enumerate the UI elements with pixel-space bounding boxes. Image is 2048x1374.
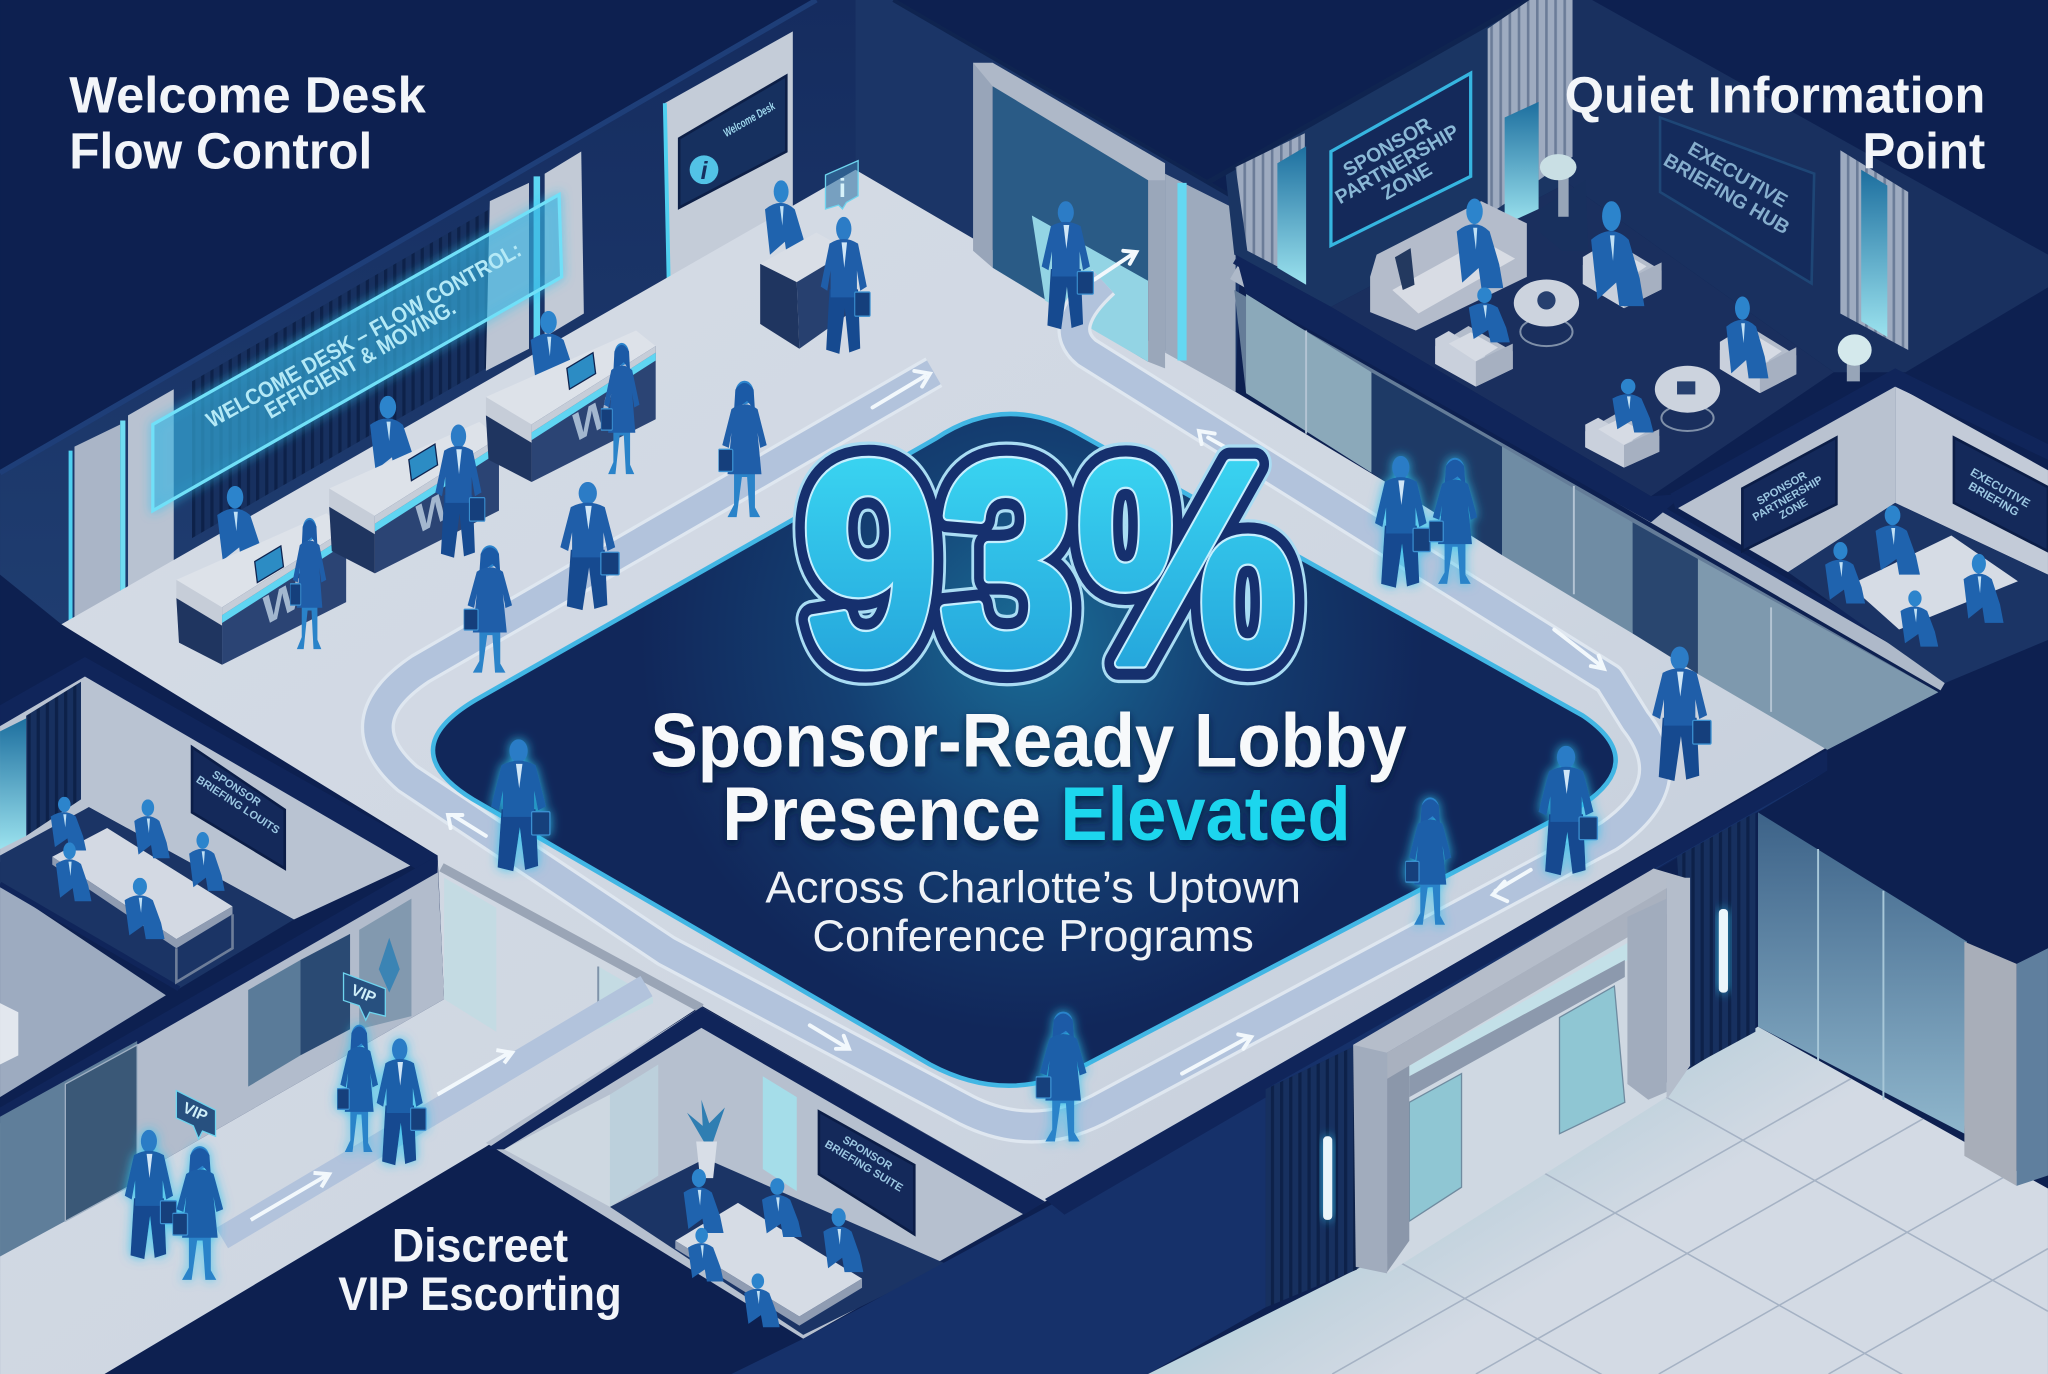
screen: executive briefing hub bbox=[1660, 118, 1814, 283]
lounge guests bbox=[1457, 199, 1768, 433]
desk 3: W bbox=[572, 384, 612, 453]
screen: executive briefing small: EXECUTIVE bbox=[1968, 466, 2032, 510]
seated attendees bbox=[684, 1169, 863, 1327]
screen: executive briefing small bbox=[1954, 438, 2048, 551]
plant bbox=[379, 938, 400, 993]
desk 3 agent bbox=[531, 311, 577, 390]
wall: door wall with entry bbox=[856, 0, 1242, 392]
corridor glass wall bbox=[1234, 261, 1945, 750]
meeting table bbox=[675, 1203, 862, 1317]
desk 2 bbox=[329, 422, 499, 573]
VIP walkway bbox=[222, 986, 647, 1238]
exit doorway bbox=[973, 63, 1236, 392]
figure: VIP pair lower bbox=[125, 1130, 223, 1280]
room: left briefing lounge bbox=[0, 657, 438, 1097]
floor tile lines bbox=[1332, 1078, 2048, 1374]
screen title: Welcome Desk bbox=[721, 99, 778, 140]
figure: right walker bbox=[1652, 647, 1711, 781]
figure: lobby woman 2 bbox=[464, 545, 512, 673]
meeting table bbox=[1849, 535, 2018, 630]
marble floor bbox=[1148, 1027, 2048, 1374]
curtains and sconces bbox=[1266, 1045, 1357, 1307]
label: quiet information point: Point bbox=[1863, 122, 1985, 179]
VIP bubble lower: VIP bbox=[180, 1100, 210, 1125]
headline line 2: Presence bbox=[722, 772, 1041, 857]
screen: executive briefing hub: BRIEFING HUB bbox=[1660, 149, 1793, 239]
screen: sponsor partnership zone small: ZONE bbox=[1777, 496, 1810, 522]
wall: welcome desk back wall bbox=[0, 0, 856, 624]
glass panels below beam bbox=[444, 878, 496, 1032]
screen: executive briefing hub: EXECUTIVE bbox=[1684, 138, 1791, 212]
desk 2: W bbox=[415, 475, 455, 545]
screen: welcome desk information bbox=[679, 76, 786, 208]
subheading line 1: Across Charlotte’s Uptown bbox=[765, 864, 1301, 913]
screen: sponsor briefing suite bbox=[819, 1111, 914, 1234]
screen: sponsor briefing: BRIEFING LOUITS bbox=[194, 774, 281, 837]
stat: 93%: 93% bbox=[801, 402, 1297, 725]
label: discreet VIP escorting bbox=[338, 1219, 622, 1320]
welcome desks bbox=[176, 311, 656, 665]
meeting table bbox=[52, 828, 233, 939]
figure: glowing woman right bbox=[1405, 797, 1451, 925]
figure: glowing woman bottom bbox=[1036, 1012, 1086, 1142]
furniture: sofa bbox=[1370, 201, 1527, 330]
figure: lobby man bbox=[560, 482, 619, 610]
desk 3 bbox=[486, 330, 656, 482]
glass sign: welcome desk flow control bbox=[153, 195, 562, 511]
headline bbox=[650, 699, 1407, 857]
figure: door man bbox=[1042, 201, 1093, 329]
figure: corridor pair bbox=[1375, 456, 1477, 588]
entrance lobby bbox=[731, 750, 2048, 1374]
icon: information: i bbox=[701, 158, 709, 185]
label: quiet information point bbox=[1565, 66, 1985, 179]
arrows: VIP walkway bbox=[251, 1050, 512, 1220]
path arrows bbox=[448, 251, 1604, 1074]
stat: 93%: 93% bbox=[801, 402, 1297, 725]
plant bbox=[687, 1100, 725, 1178]
label: welcome desk flow control: Flow Control bbox=[69, 122, 372, 179]
stone pillar bbox=[1964, 942, 2017, 1186]
guests at desks bbox=[290, 518, 326, 649]
desk 1 bbox=[176, 513, 346, 665]
sign text line 2: EFFICIENT & MOVING. bbox=[260, 295, 460, 424]
seated attendees bbox=[1825, 505, 2004, 647]
VIP bubble lower bbox=[176, 1091, 216, 1139]
desk 1 agent bbox=[217, 486, 264, 565]
VIP bubble upper bbox=[344, 973, 385, 1020]
coffee tables bbox=[1514, 280, 1720, 431]
stat: 93%: 93% bbox=[801, 402, 1297, 725]
room: executive briefing bbox=[1671, 368, 2048, 683]
interior behind doors bbox=[1387, 888, 1667, 1273]
central diamond panel bbox=[433, 414, 1616, 1086]
screen: sponsor partnership zone: PARTNERSHIP bbox=[1332, 120, 1463, 209]
screen: sponsor partnership zone bbox=[1322, 73, 1473, 246]
wall: VIP corridor bbox=[0, 855, 701, 1256]
screen: sponsor briefing: SPONSOR bbox=[210, 769, 263, 809]
label: welcome desk flow control: Welcome Desk bbox=[69, 66, 426, 123]
screen: sponsor partnership zone small bbox=[1742, 438, 1836, 551]
icon: info bubble: i bbox=[839, 173, 846, 203]
figure: lobby woman bbox=[718, 381, 767, 517]
room: lounge bbox=[1207, 0, 2048, 522]
seated attendees bbox=[51, 797, 225, 939]
walking figures bbox=[125, 201, 1711, 1280]
curtains bbox=[1236, 133, 1305, 281]
headline highlight: Elevated bbox=[1061, 772, 1351, 857]
subheading line 2: Conference Programs bbox=[812, 912, 1254, 961]
desk 2 agent bbox=[370, 396, 417, 475]
room: sponsor briefing suite bbox=[486, 1007, 1045, 1339]
headline line 1: Sponsor-Ready Lobby bbox=[650, 699, 1407, 784]
screen: sponsor briefing suite: BRIEFING SUITE bbox=[822, 1138, 905, 1194]
left room fragment bbox=[0, 1003, 18, 1064]
information stand bbox=[760, 161, 870, 354]
label: welcome desk flow control bbox=[69, 66, 426, 179]
figure: VIP pair upper bbox=[337, 1025, 426, 1165]
stat: 93%: 93% bbox=[801, 402, 1297, 725]
desk 1: W bbox=[263, 567, 303, 636]
label: discreet VIP escorting: Discreet bbox=[392, 1219, 569, 1272]
VIP bubble upper: VIP bbox=[349, 982, 378, 1007]
label: discreet VIP escorting: VIP Escorting bbox=[338, 1267, 622, 1320]
main floor bbox=[0, 170, 1827, 1374]
screen: sponsor briefing suite: SPONSOR bbox=[840, 1134, 894, 1173]
screen: sponsor partnership zone: ZONE bbox=[1378, 158, 1436, 205]
tablets bbox=[255, 353, 596, 583]
icon: info bubble bbox=[825, 161, 858, 209]
walkway ring bbox=[378, 282, 1655, 1126]
label: quiet information point: Quiet Information bbox=[1565, 66, 1985, 123]
navy entrance wall bbox=[731, 1089, 1266, 1374]
screen: sponsor partnership zone small: PARTNERSHIP bbox=[1751, 474, 1825, 524]
screen: sponsor partnership zone: SPONSOR bbox=[1339, 114, 1435, 182]
sign text: WELCOME DESK – FLOW CONTROL: bbox=[202, 237, 525, 433]
figure: glowing man left bbox=[491, 739, 550, 871]
screen: sponsor partnership zone small: SPONSOR bbox=[1755, 470, 1809, 508]
furniture: armchairs bbox=[1435, 243, 1796, 468]
lamps bbox=[1540, 154, 1872, 381]
figure: glowing man right bbox=[1539, 746, 1597, 875]
screen: sponsor briefing bbox=[192, 747, 289, 869]
glass storefront bbox=[1758, 812, 1967, 1134]
subheading bbox=[765, 864, 1301, 961]
portal frame bbox=[1387, 1053, 1409, 1272]
screen: executive briefing small: BRIEFING bbox=[1966, 480, 2021, 519]
